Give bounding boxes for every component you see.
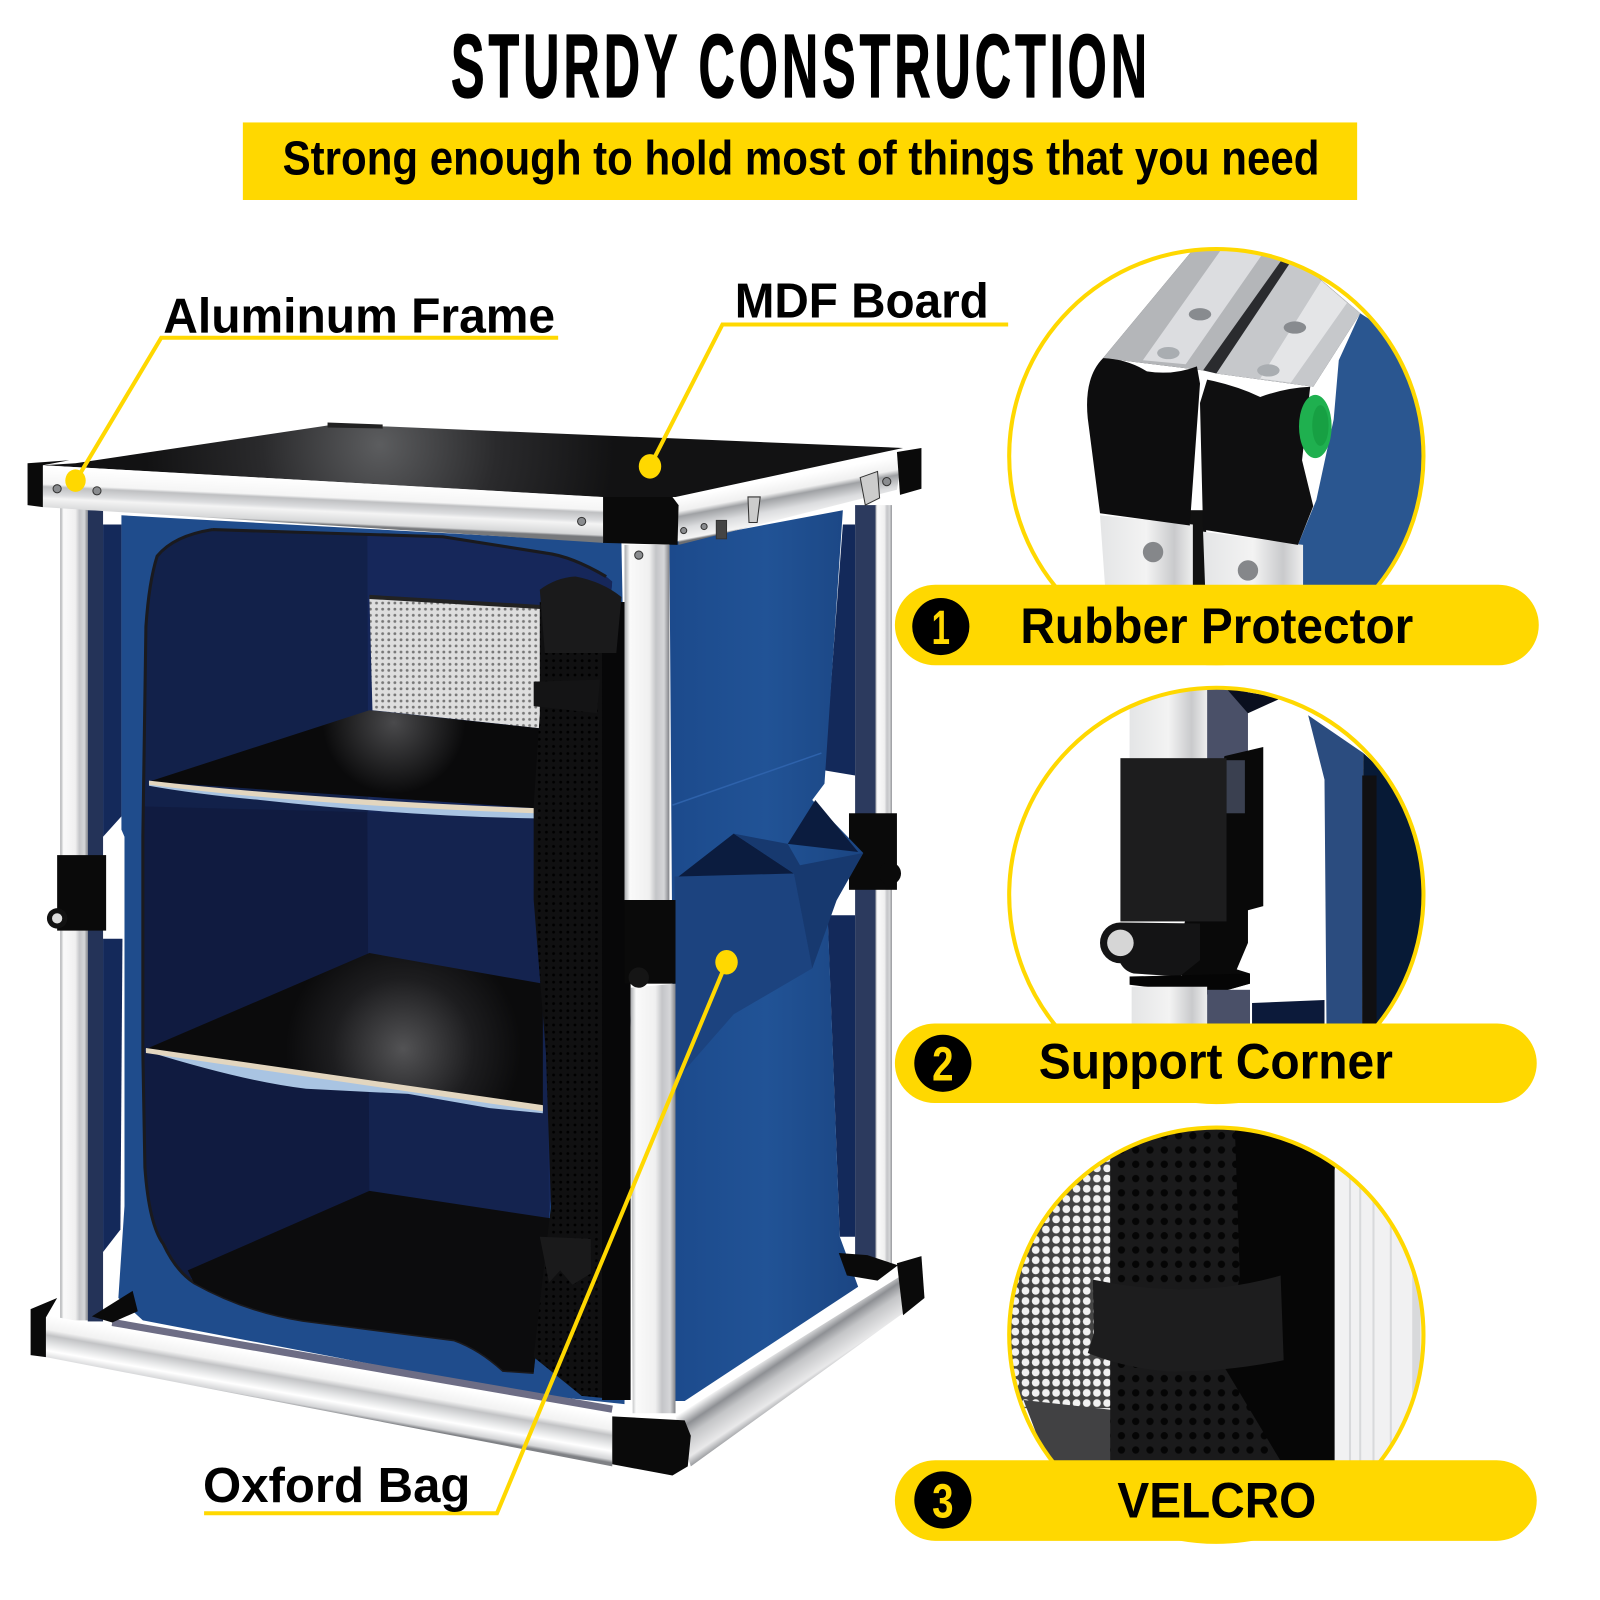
leader: Aluminum Frame [65, 290, 558, 492]
callout 2: Support Corner [895, 1023, 1537, 1103]
shelf one [149, 710, 543, 818]
front column [624, 545, 676, 1413]
callout 1: Rubber Protector: Rubber Protector [1020, 598, 1413, 654]
callout 3: VELCRO [895, 1460, 1537, 1541]
product: folding camping cabinet [28, 422, 924, 1476]
bag interior [133, 520, 622, 1388]
left leg [47, 507, 106, 1321]
base front rail [46, 1315, 612, 1466]
callout 1: Rubber Protector [895, 585, 1539, 665]
mesh back window [369, 597, 543, 729]
top board [43, 422, 903, 497]
detail circle 3: velcro [1005, 1122, 1427, 1542]
front top rail [43, 465, 603, 543]
subtitle banner: Strong enough to hold most of things that you need [283, 132, 1319, 185]
leader: Oxford Bag [203, 950, 738, 1513]
callout 3: VELCRO: 3 [932, 1475, 954, 1528]
detail circle 2: support corner [1009, 684, 1429, 1102]
detail circle 1: rubber protector [1009, 245, 1429, 663]
callout 1: Rubber Protector: 1 [932, 602, 950, 655]
back right leg [849, 505, 901, 1265]
bottom shelf [188, 1191, 551, 1372]
shelf two [146, 953, 543, 1113]
right side panel [669, 510, 863, 1401]
side pocket [674, 800, 863, 1071]
callout 3: VELCRO: VELCRO [1117, 1472, 1316, 1528]
callout 2: Support Corner: 2 [932, 1039, 954, 1092]
callout 2: Support Corner: Support Corner [1039, 1034, 1393, 1090]
leader: MDF Board [639, 274, 1008, 479]
blue bag front [118, 515, 631, 1404]
leader: MDF Board: MDF Board [735, 274, 989, 328]
base back strip [112, 1322, 612, 1409]
mesh side pocket [534, 577, 631, 1400]
base corners [31, 1253, 924, 1476]
dark side flaps [103, 524, 122, 1252]
base right rail [676, 1274, 903, 1466]
top corners [28, 448, 921, 545]
leader: Aluminum Frame: Aluminum Frame [163, 290, 555, 344]
subtitle banner [243, 122, 1357, 200]
leader: Oxford Bag: Oxford Bag [203, 1459, 470, 1513]
rivets and latches [53, 471, 891, 1439]
right top rail [677, 453, 903, 545]
